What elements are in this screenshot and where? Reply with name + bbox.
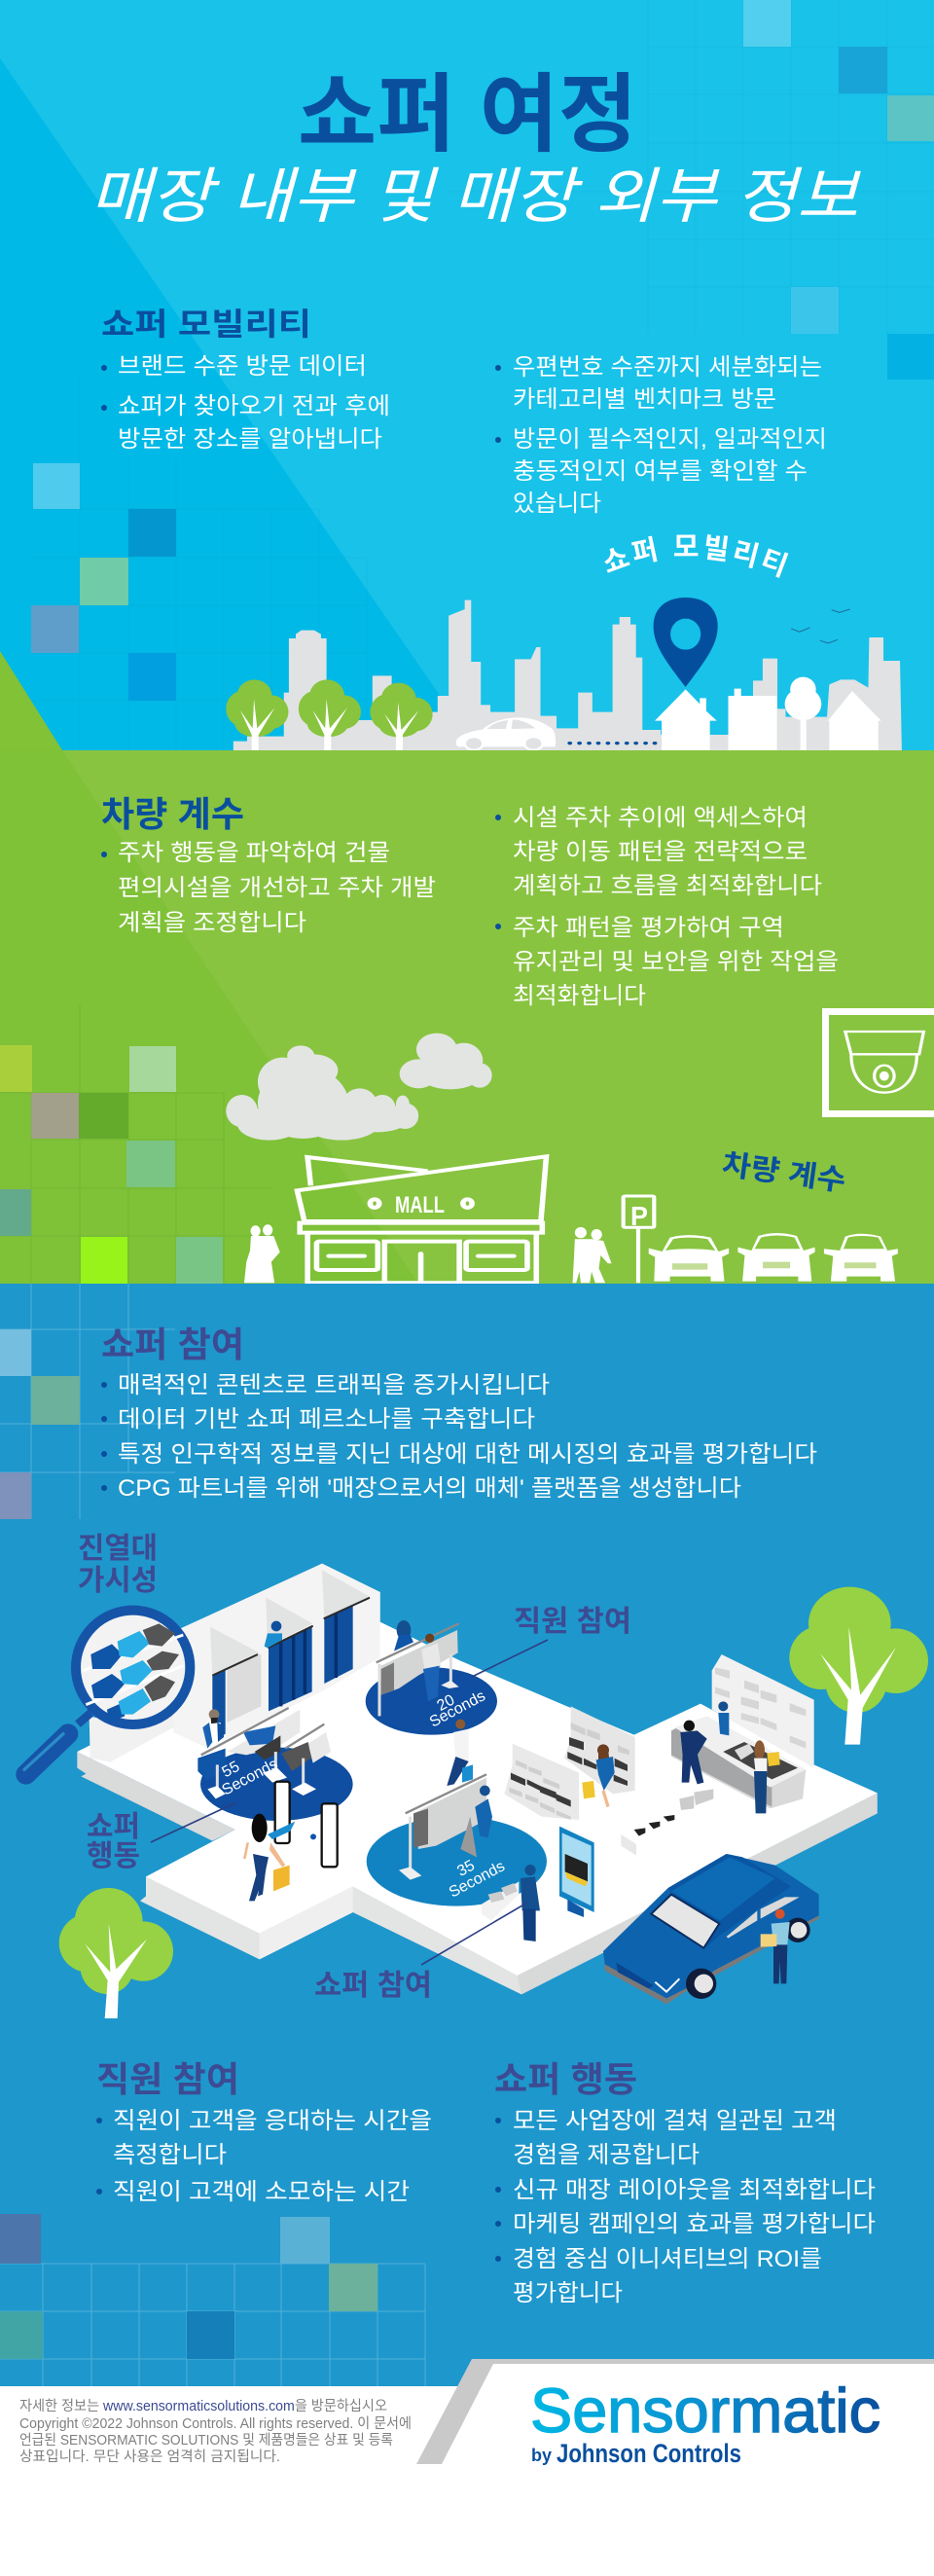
logo: Sensormatic: by xyxy=(531,2446,552,2465)
zone labels: 35 xyxy=(454,1857,478,1880)
text block: right bullets: 계획하고 흐름을 최적화합니다 xyxy=(513,873,822,899)
divider: grey slash xyxy=(416,2359,934,2464)
text block: right bullets xyxy=(495,805,839,1009)
text block: engagement bullets: CPG 파트너를 위해 '매장으로서의 매체' 플랫폼을 생성합니다 xyxy=(118,1475,741,1502)
label: shelf visibility: 가시성 xyxy=(78,1565,158,1597)
panel: vehicle counting xyxy=(0,750,934,1284)
trees xyxy=(226,679,433,750)
checkout counter xyxy=(671,1716,806,1808)
text block: right bullets: 충동적인지 여부를 확인할 수 xyxy=(513,458,808,485)
illustration: tree left xyxy=(59,1888,173,2018)
panel: shopper mobility xyxy=(0,0,934,750)
text block: behaviour bullets: 경험 중심 이니셔티브의 ROI를 xyxy=(513,2246,822,2272)
text block: staff bullets: 직원이 고객에 소모하는 시간 xyxy=(113,2179,410,2205)
illustration: blue car xyxy=(603,1854,819,2004)
text block: right bullets: 주차 패턴을 평가하여 구역 xyxy=(513,915,784,941)
text block: left bullets xyxy=(101,840,436,936)
subtitle: 매장 내부 및 매장 외부 정보 xyxy=(90,163,861,231)
icon: parking sign xyxy=(624,1196,654,1283)
illustration: city skyline xyxy=(226,598,902,750)
title: 쇼퍼 여정 xyxy=(298,66,637,163)
heading: shopper behaviour: 쇼퍼 행동 xyxy=(494,2059,637,2099)
zone labels: 55 xyxy=(220,1759,242,1781)
zone labels: Seconds xyxy=(220,1756,280,1799)
text block: behaviour bullets: 마케팅 캠페인의 효과를 평가합니다 xyxy=(513,2211,876,2237)
text block: staff bullets: 측정합니다 xyxy=(113,2142,227,2168)
footer xyxy=(0,2359,934,2576)
decorative squares bottom xyxy=(0,2214,377,2359)
text block: left bullets: 방문한 장소를 알아냅니다 xyxy=(118,426,382,453)
label: shopper behaviour: 행동 xyxy=(87,1840,140,1872)
houses xyxy=(655,677,881,750)
birds xyxy=(791,609,850,643)
text block: left bullets: 주차 행동을 파악하여 건물 xyxy=(118,840,390,866)
road dots xyxy=(567,742,666,744)
text block: right bullets: 우편번호 수준까지 세분화되는 xyxy=(513,354,822,381)
label: staff engagement: 직원 참여 xyxy=(514,1606,631,1638)
mall sign text: MALL xyxy=(395,1192,445,1218)
footer legal text: 상표입니다. 무단 사용은 엄격히 금지됩니다. xyxy=(19,2449,280,2465)
footer legal text: 자세한 정보는 www.sensormaticsolutions.com을 방문하십시오 xyxy=(19,2398,387,2414)
text block: right bullets xyxy=(495,354,827,517)
fitting rooms xyxy=(90,1564,380,1762)
text block: right bullets: 차량 이동 패턴을 전략적으로 xyxy=(513,839,808,865)
text block: right bullets: 방문이 필수적인지, 일과적인지 xyxy=(513,426,827,453)
illustration: magnifier over shelves xyxy=(24,1611,190,1774)
text block: left bullets xyxy=(101,353,390,453)
store floor xyxy=(77,1564,878,1994)
car xyxy=(456,717,556,750)
icon: location pin xyxy=(654,598,718,687)
text block: engagement bullets xyxy=(101,1372,817,1502)
decorative squares xyxy=(0,1329,80,1519)
decorative squares: bottom left xyxy=(31,463,176,701)
text block: left bullets: 편의시설을 개선하고 주차 개발 xyxy=(118,875,436,901)
footer legal text xyxy=(19,2398,412,2465)
text block: staff bullets xyxy=(96,2108,432,2205)
text block: engagement bullets: 데이터 기반 쇼퍼 페르소나를 구축합니다 xyxy=(118,1406,535,1433)
icon: security camera xyxy=(825,1012,934,1113)
text block: right bullets: 있습니다 xyxy=(513,490,601,517)
text block: behaviour bullets xyxy=(495,2108,876,2306)
text block: right bullets: 시설 주차 추이에 액세스하여 xyxy=(513,805,808,831)
panel: shopper engagement xyxy=(0,1284,934,2386)
security gates xyxy=(275,1782,338,1867)
figures xyxy=(460,1701,780,1941)
illustration: isometric store xyxy=(77,1564,878,1994)
text block: staff bullets: 직원이 고객을 응대하는 시간을 xyxy=(113,2108,432,2134)
digital signage xyxy=(559,1827,594,1917)
icon: parking sign: P xyxy=(630,1201,648,1231)
dwell zones xyxy=(200,1667,547,1906)
rotated label: vehicle counting: 차량 계수 xyxy=(720,1148,847,1198)
curved label: shopper mobility: 쇼퍼 모빌리티 xyxy=(604,534,788,578)
footer legal text: Copyright ©2022 Johnson Controls. All rights reserved. 이 문서에 xyxy=(19,2415,412,2432)
delivery person xyxy=(761,1909,790,1983)
text block: right bullets: 카테고리별 벤치마크 방문 xyxy=(513,386,776,413)
decorative squares xyxy=(0,1045,223,1284)
label: shopper behaviour: 쇼퍼 xyxy=(87,1811,140,1843)
logo: Sensormatic: Johnson Controls xyxy=(557,2439,741,2468)
footer legal text: 언급된 SENSORMATIC SOLUTIONS 및 제품명들은 상표 및 등록 xyxy=(19,2432,393,2449)
zone labels: 20 xyxy=(435,1691,457,1715)
text block: engagement bullets: 매력적인 콘텐츠로 트래픽을 증가시킵니다 xyxy=(118,1372,550,1398)
display table xyxy=(621,1789,725,1856)
shelving units xyxy=(504,1654,814,1820)
decorative squares: top right xyxy=(743,0,934,380)
text block: left bullets: 브랜드 수준 방문 데이터 xyxy=(118,353,367,380)
shoppers left xyxy=(202,1620,473,1901)
heading: staff engagement: 직원 참여 xyxy=(96,2059,239,2099)
illustration: clouds xyxy=(226,1034,492,1141)
text block: left bullets: 쇼퍼가 찾아오기 전과 후에 xyxy=(118,393,390,419)
decorative grid bottom xyxy=(0,2264,425,2386)
label: shelf visibility xyxy=(78,1533,158,1597)
text block: behaviour bullets: 경험을 제공합니다 xyxy=(513,2142,700,2168)
zone labels xyxy=(220,1687,508,1902)
label: shopper behaviour xyxy=(87,1811,140,1872)
heading: shopper engagement: 쇼퍼 참여 xyxy=(101,1324,244,1364)
illustration: pedestrians xyxy=(244,1224,612,1283)
text block: behaviour bullets: 신규 매장 레이아웃을 최적화합니다 xyxy=(513,2177,876,2203)
text block: right bullets: 최적화합니다 xyxy=(513,983,646,1009)
leader lines xyxy=(151,1640,548,1965)
illustration: tree right xyxy=(789,1587,928,1745)
text block: engagement bullets: 특정 인구학적 정보를 지닌 대상에 대한 메시징의 효과를 평가합니다 xyxy=(118,1441,817,1468)
illustration: mall building xyxy=(297,1156,547,1283)
text block: right bullets: 유지관리 및 보안을 위한 작업을 xyxy=(513,949,839,975)
logo: Sensormatic: Sensormatic xyxy=(530,2376,880,2446)
label: shelf visibility: 진열대 xyxy=(78,1533,158,1565)
gate sensor dot xyxy=(310,1833,316,1839)
text block: behaviour bullets: 평가합니다 xyxy=(513,2280,623,2306)
illustration: parked cars xyxy=(649,1233,898,1282)
text block: left bullets: 계획을 조정합니다 xyxy=(118,910,306,936)
zone labels: Seconds xyxy=(447,1858,508,1902)
heading: vehicle counting: 차량 계수 xyxy=(101,794,244,834)
heading: shopper mobility: 쇼퍼 모빌리티 xyxy=(101,307,311,342)
label: shopper engagement: 쇼퍼 참여 xyxy=(314,1970,432,2002)
text block: behaviour bullets: 모든 사업장에 걸쳐 일관된 고객 xyxy=(513,2108,837,2134)
front display xyxy=(482,1881,519,1920)
clothing racks xyxy=(198,1623,486,1880)
zone labels: Seconds xyxy=(427,1687,488,1731)
